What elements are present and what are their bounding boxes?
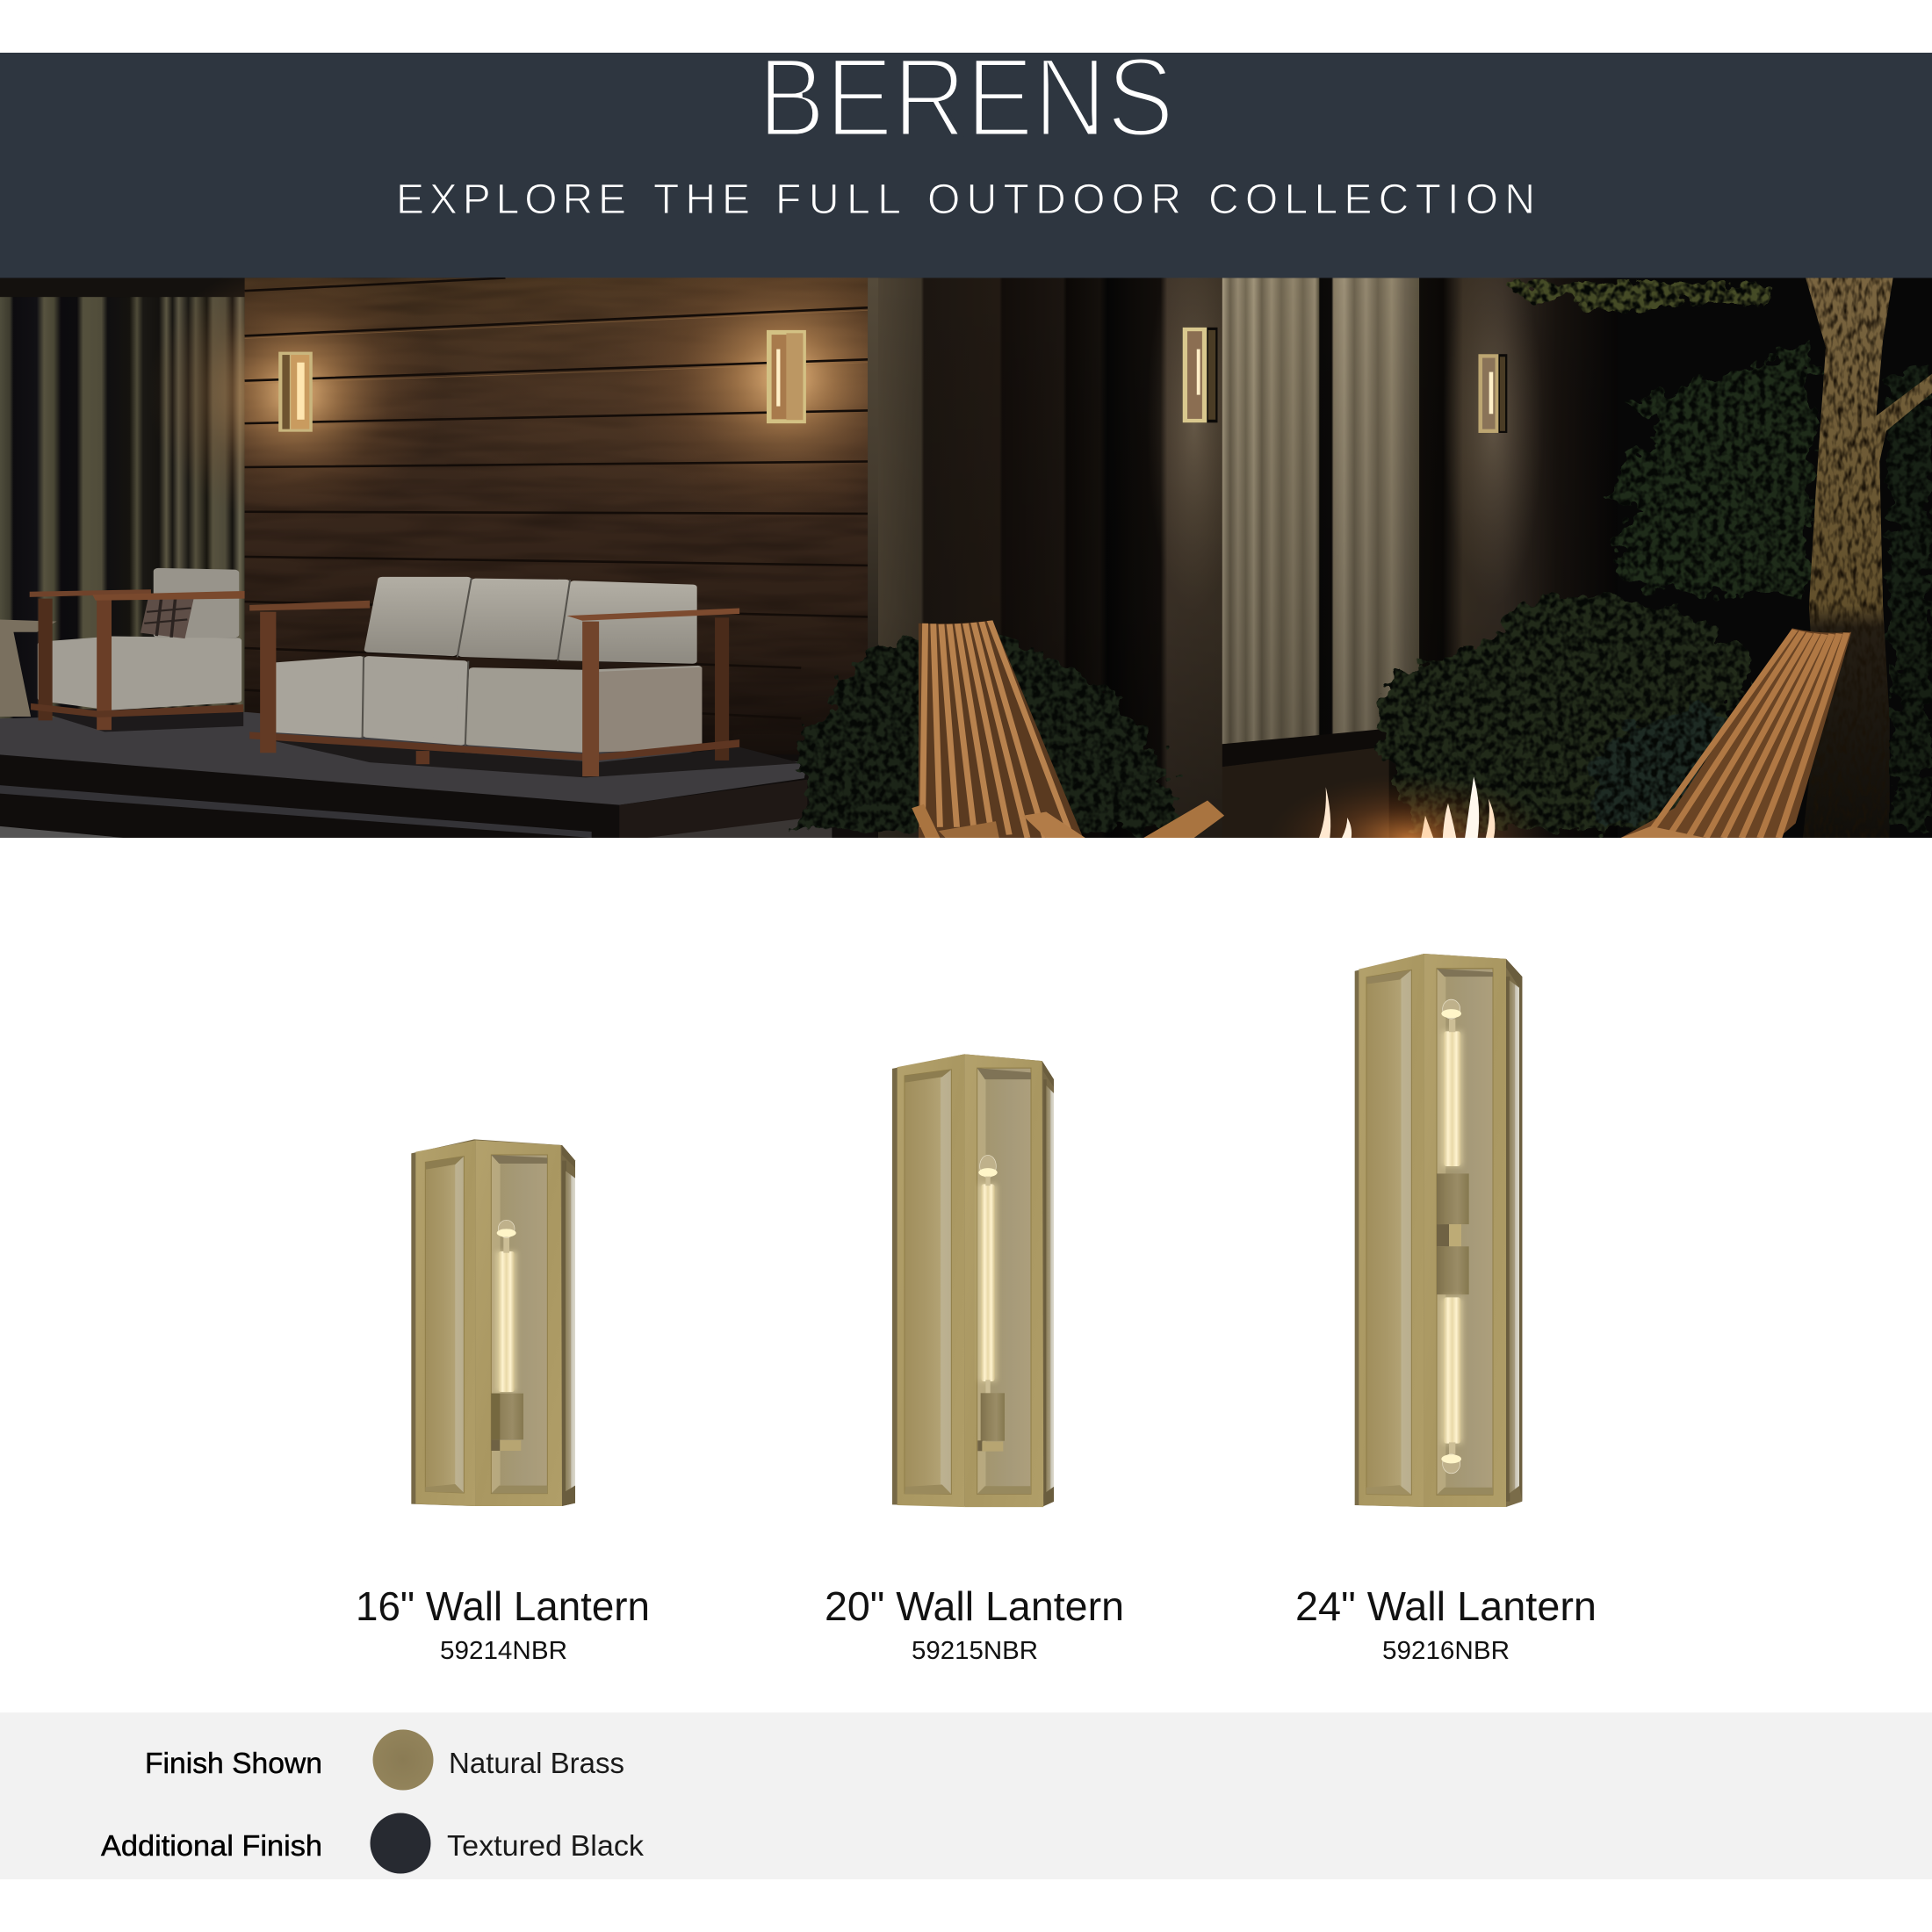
subtitle: COLLECTION	[1208, 177, 1535, 223]
curtain	[1222, 278, 1419, 838]
subtitle: FULL	[775, 177, 901, 223]
title: BERENS	[758, 35, 1174, 161]
caption: 20 inch lantern: 59215NBR	[912, 1637, 1038, 1665]
wall lantern 2	[767, 330, 806, 423]
additional finish row	[101, 1813, 645, 1874]
curtains left	[0, 278, 245, 727]
foliage far right	[1886, 366, 1932, 645]
upper bulb	[1441, 999, 1463, 1166]
wall and posts	[878, 233, 1618, 841]
photo: outdoor lifestyle scene	[0, 278, 1932, 838]
additional finish row: Additional Finish	[101, 1829, 322, 1862]
wall lantern 4	[1478, 354, 1507, 433]
bulb	[978, 1155, 998, 1394]
wall lantern 3	[1183, 328, 1217, 422]
lantern: 24 inch	[1355, 954, 1522, 1507]
header band	[0, 35, 1932, 278]
side table	[0, 619, 57, 717]
finish legend band	[0, 1712, 1932, 1879]
wall lantern 1	[278, 352, 313, 432]
caption: 20 inch lantern: 20" Wall Lantern	[825, 1583, 1124, 1629]
wood wall	[170, 278, 880, 748]
socket	[977, 1393, 1005, 1452]
right chair	[1621, 628, 1851, 838]
armchair	[30, 571, 245, 730]
fire glow and flames	[1268, 774, 1550, 904]
twin socket	[1437, 1173, 1469, 1294]
bush right lower	[1590, 705, 1728, 827]
foliage top	[1510, 283, 1765, 313]
photo left: patio with sofa	[0, 278, 880, 838]
caption: 20 inch lantern	[825, 1583, 1124, 1665]
bush far right lower	[1893, 606, 1932, 831]
caption: 16 inch lantern	[356, 1583, 650, 1665]
finish shown row	[145, 1730, 624, 1790]
left chair	[912, 620, 1224, 838]
tree foliage back	[1604, 343, 1813, 599]
caption: 16 inch lantern: 16" Wall Lantern	[356, 1583, 650, 1629]
subtitle: THE	[653, 177, 750, 223]
caption: 24 inch lantern: 24" Wall Lantern	[1295, 1583, 1597, 1629]
caption: 24 inch lantern: 59216NBR	[1382, 1637, 1510, 1665]
subtitle: EXPLORE	[396, 177, 626, 223]
deck	[0, 709, 875, 842]
finish shown row: Finish Shown	[145, 1747, 322, 1779]
sofa	[249, 578, 739, 776]
subtitle: OUTDOOR	[927, 177, 1181, 223]
pillar	[868, 278, 878, 649]
caption: 16 inch lantern: 59214NBR	[440, 1637, 567, 1665]
additional finish row: Textured Black	[447, 1829, 645, 1862]
bulb	[496, 1220, 516, 1392]
tree trunk	[1802, 278, 1932, 842]
bush right	[1375, 595, 1752, 831]
caption: 24 inch lantern	[1295, 1583, 1597, 1665]
lower bulb	[1441, 1297, 1463, 1474]
bush left	[791, 631, 1180, 831]
finish shown row: Natural Brass	[449, 1747, 624, 1779]
lantern: 20 inch	[892, 1054, 1054, 1507]
photo right: garden with fire pit	[791, 233, 1932, 904]
socket	[491, 1394, 523, 1451]
lantern: 16 inch	[411, 1139, 575, 1506]
subtitle	[396, 177, 1535, 223]
